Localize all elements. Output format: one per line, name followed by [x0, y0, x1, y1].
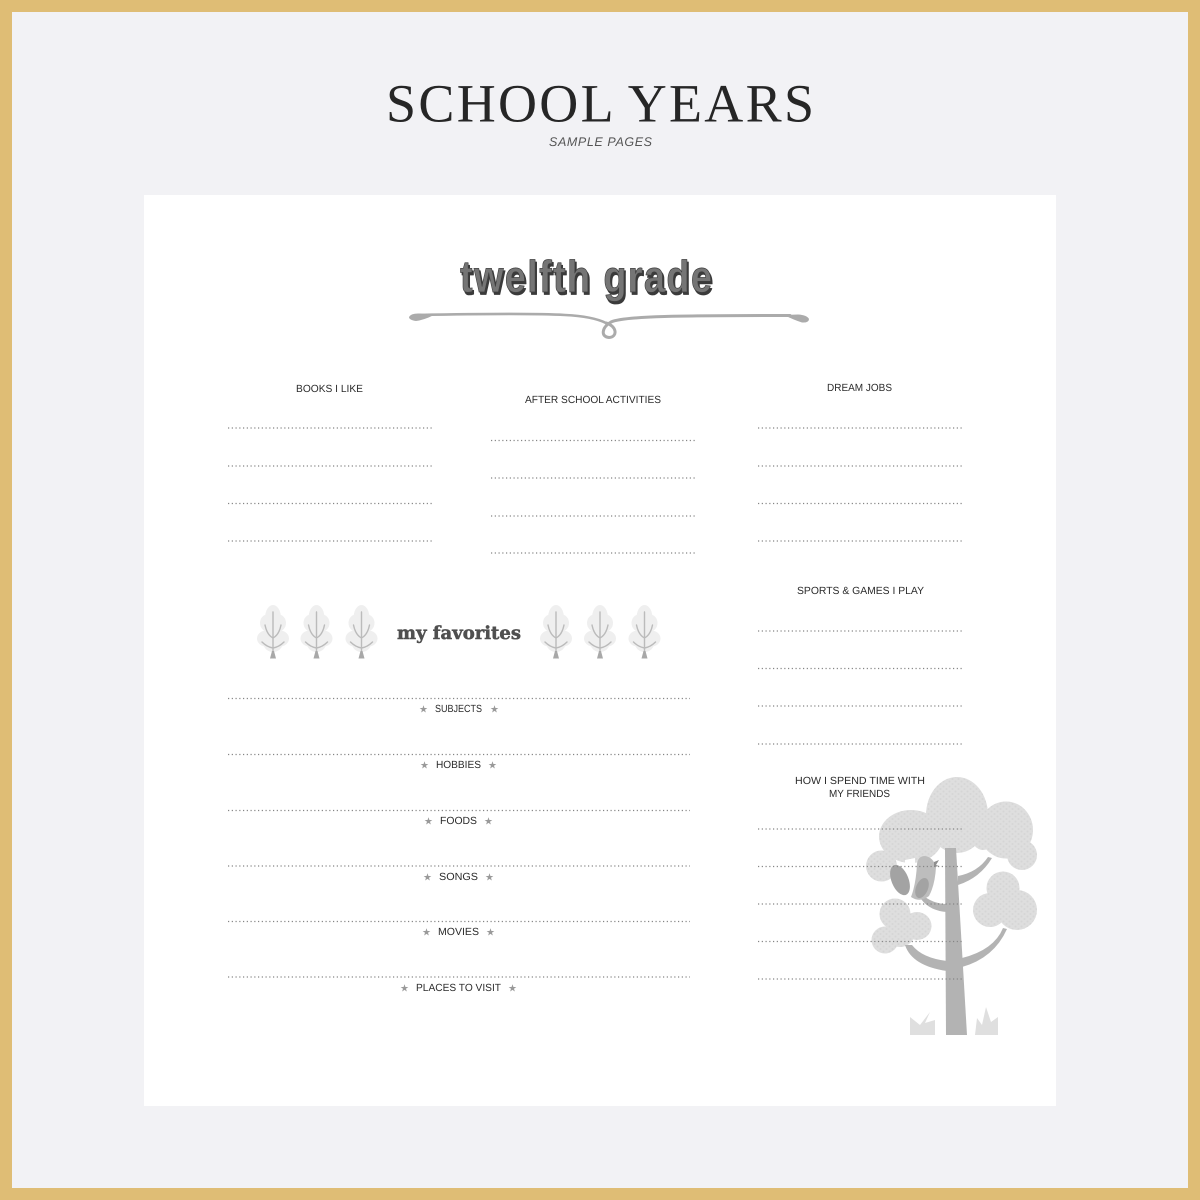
section: how I spend time with my friends: MY FRIENDS: [829, 789, 890, 800]
section: dream jobs: [758, 383, 962, 541]
tree canopy: [866, 777, 1037, 954]
tree trunk and branches: [905, 848, 1007, 1035]
section: after school activities: [491, 395, 695, 553]
favorite: movies: MOVIES: [438, 927, 479, 938]
leaves right: [540, 605, 660, 658]
favorite: places to visit: ★: [508, 984, 517, 994]
grass tufts: [910, 1007, 998, 1035]
favorite: foods: [228, 810, 690, 828]
favorite: movies: ★: [486, 928, 495, 938]
favorite: songs: ★: [423, 872, 432, 884]
favorite: subjects: [228, 698, 690, 716]
illustration: tree with bird: [866, 777, 1037, 1035]
favorite: hobbies: HOBBIES: [436, 760, 481, 771]
section: how I spend time with my friends: HOW I SPEND TIME WITH: [795, 776, 925, 787]
favorite: foods: ★: [424, 816, 433, 828]
favorite: hobbies: ★: [420, 760, 429, 772]
favorite: songs: ★: [485, 872, 494, 884]
section: sports and games: SPORTS & GAMES I PLAY: [797, 586, 924, 597]
favorite: foods: ★: [484, 816, 493, 828]
favorite: subjects: ★: [419, 704, 428, 716]
favorite: foods: FOODS: [440, 816, 477, 827]
favorite: places to visit: PLACES TO VISIT: [416, 983, 502, 994]
heading: my favorites: my favorites: [397, 623, 521, 644]
panel: white sample page: [144, 195, 1056, 1106]
favorite: places to visit: [228, 977, 690, 994]
favorite: movies: [228, 922, 690, 938]
subtitle: SAMPLE PAGES: [549, 135, 653, 149]
favorite: movies: ★: [422, 928, 431, 938]
favorite: songs: SONGS: [439, 872, 478, 883]
section: books I like: [228, 384, 432, 541]
favorite: places to visit: ★: [400, 984, 409, 994]
heading: twelfth grade: twelfth grade: [460, 253, 712, 303]
section: dream jobs: DREAM JOBS: [827, 383, 892, 394]
leaves left: [257, 605, 378, 658]
favorite: hobbies: ★: [488, 760, 497, 772]
flourish divider: [409, 313, 809, 338]
bird: [886, 856, 939, 900]
heading: twelfth grade: twelfth grade: [462, 256, 714, 305]
title: SCHOOL YEARS: [386, 74, 814, 134]
favorite: subjects: SUBJECTS: [435, 704, 482, 715]
section: books I like: BOOKS I LIKE: [296, 384, 363, 395]
section: after school activities: AFTER SCHOOL ACTIVITIES: [525, 395, 661, 406]
favorite: subjects: ★: [490, 704, 499, 716]
favorite: songs: [228, 866, 690, 884]
section: how I spend time with my friends: [758, 776, 962, 979]
favorite: hobbies: [228, 754, 690, 772]
section: sports and games: [758, 586, 962, 744]
